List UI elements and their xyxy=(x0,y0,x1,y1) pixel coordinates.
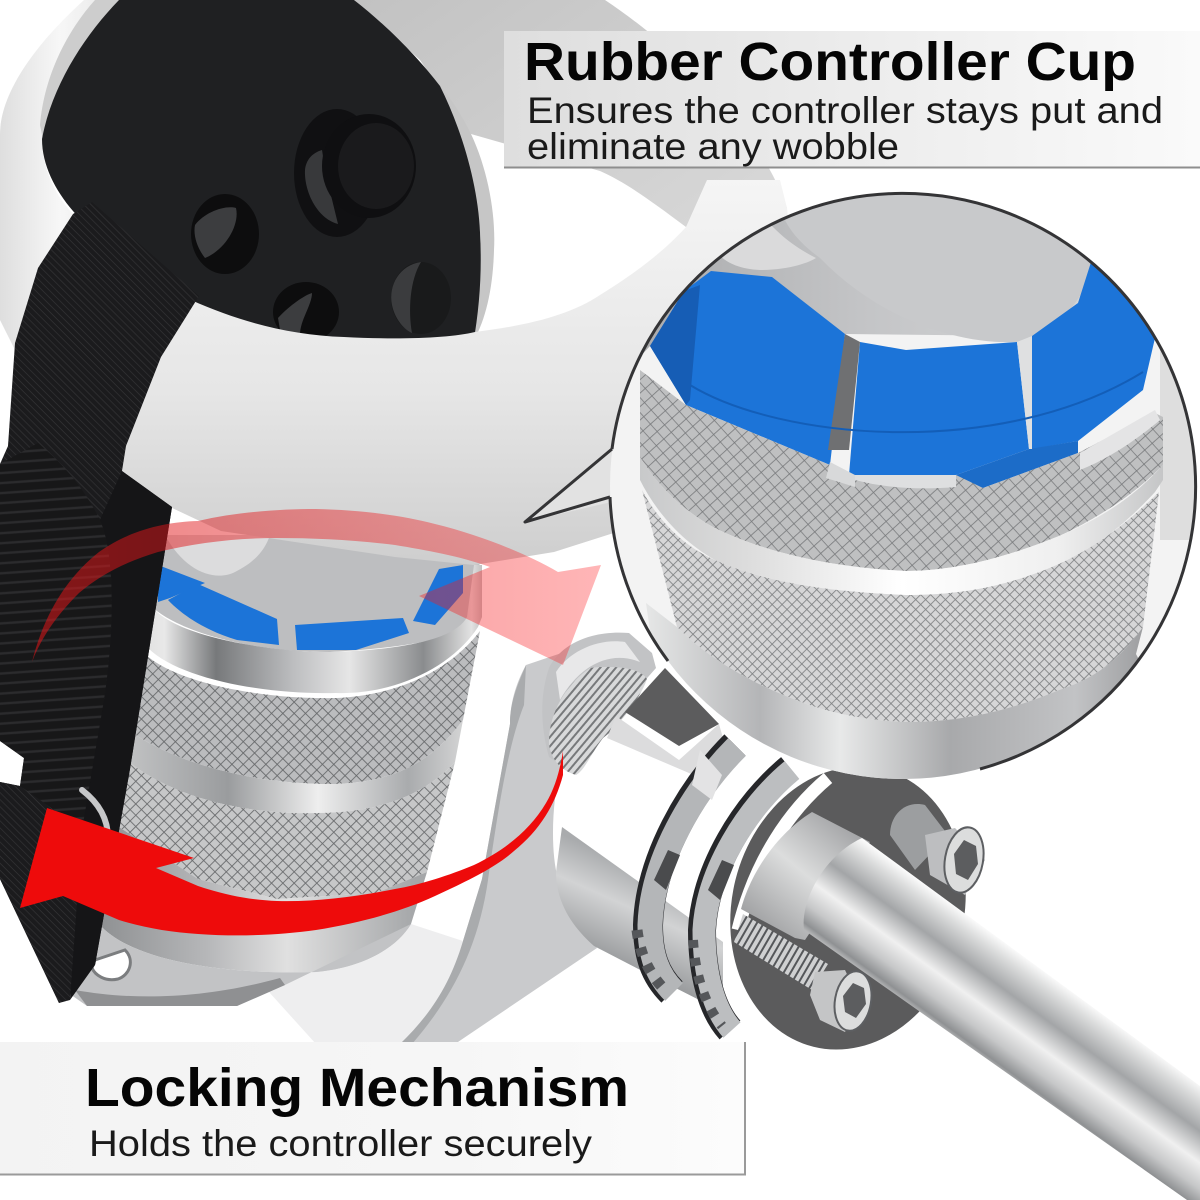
black strap xyxy=(0,202,199,1003)
white divider band in lens xyxy=(640,457,1163,595)
controller black face xyxy=(42,0,481,345)
controller ring left side xyxy=(0,0,122,350)
knurled band upper xyxy=(134,631,480,784)
caption line 1: Ensures the controller stays put and xyxy=(527,90,1163,131)
heading: Locking Mechanism: Locking Mechanism xyxy=(85,1058,629,1118)
knurled band lower xyxy=(119,762,455,899)
strap dark edge xyxy=(70,471,172,1000)
lens right backdrop xyxy=(1160,350,1194,540)
heading: Rubber Controller Cup: Rubber Controller Cup xyxy=(524,32,1136,92)
upper knurled band in lens xyxy=(640,370,1163,571)
controller ring lower band xyxy=(122,180,790,565)
threaded bolt xyxy=(542,633,656,775)
lens outline xyxy=(612,193,1196,769)
lower screw xyxy=(734,914,876,1034)
caption line 2: eliminate any wobble xyxy=(527,126,899,167)
white bracket xyxy=(269,640,600,1044)
upper cap screw xyxy=(890,804,988,896)
lower red rotation arrow xyxy=(20,751,563,935)
strap silver clip xyxy=(82,790,108,838)
round clamp disc xyxy=(701,741,995,1075)
callout pointer outline xyxy=(525,449,612,522)
callout pointer xyxy=(525,441,620,522)
blue rubber insert xyxy=(650,259,1155,488)
clamp white gap xyxy=(738,778,828,930)
upper red rotation arrow xyxy=(32,509,601,665)
bottom caption box xyxy=(0,1042,745,1174)
cup divider band xyxy=(129,720,463,813)
cup collar xyxy=(99,827,427,972)
top caption box xyxy=(504,31,1200,168)
controller ring upper band xyxy=(354,0,790,338)
bolt thread xyxy=(549,667,647,775)
strap lower tab xyxy=(0,782,82,1003)
strap stitched panel xyxy=(0,443,112,830)
blue insert segments xyxy=(158,565,463,650)
cup metal body xyxy=(99,565,482,972)
caption: Holds the controller securely: Holds the controller securely xyxy=(89,1123,593,1164)
icon: face button lower xyxy=(273,282,339,342)
icon: face button right xyxy=(391,262,451,334)
bracket arm behind magnifier xyxy=(607,668,725,776)
base plate xyxy=(67,924,411,1006)
icon: face button left xyxy=(191,194,259,274)
rod hub xyxy=(741,812,870,940)
clamp ring right xyxy=(693,768,792,1030)
main rod xyxy=(804,838,1200,1200)
lens outline lower left xyxy=(610,497,668,661)
rear clamp rod xyxy=(556,827,723,1012)
controller base in lens xyxy=(643,194,1090,354)
cup interior xyxy=(150,535,482,652)
clamp ring left xyxy=(637,745,737,992)
lower knurled band in lens xyxy=(642,490,1159,722)
icon: thumbstick xyxy=(294,109,416,237)
magnified detail lens xyxy=(525,190,1200,800)
lower collar in lens xyxy=(646,603,1143,779)
